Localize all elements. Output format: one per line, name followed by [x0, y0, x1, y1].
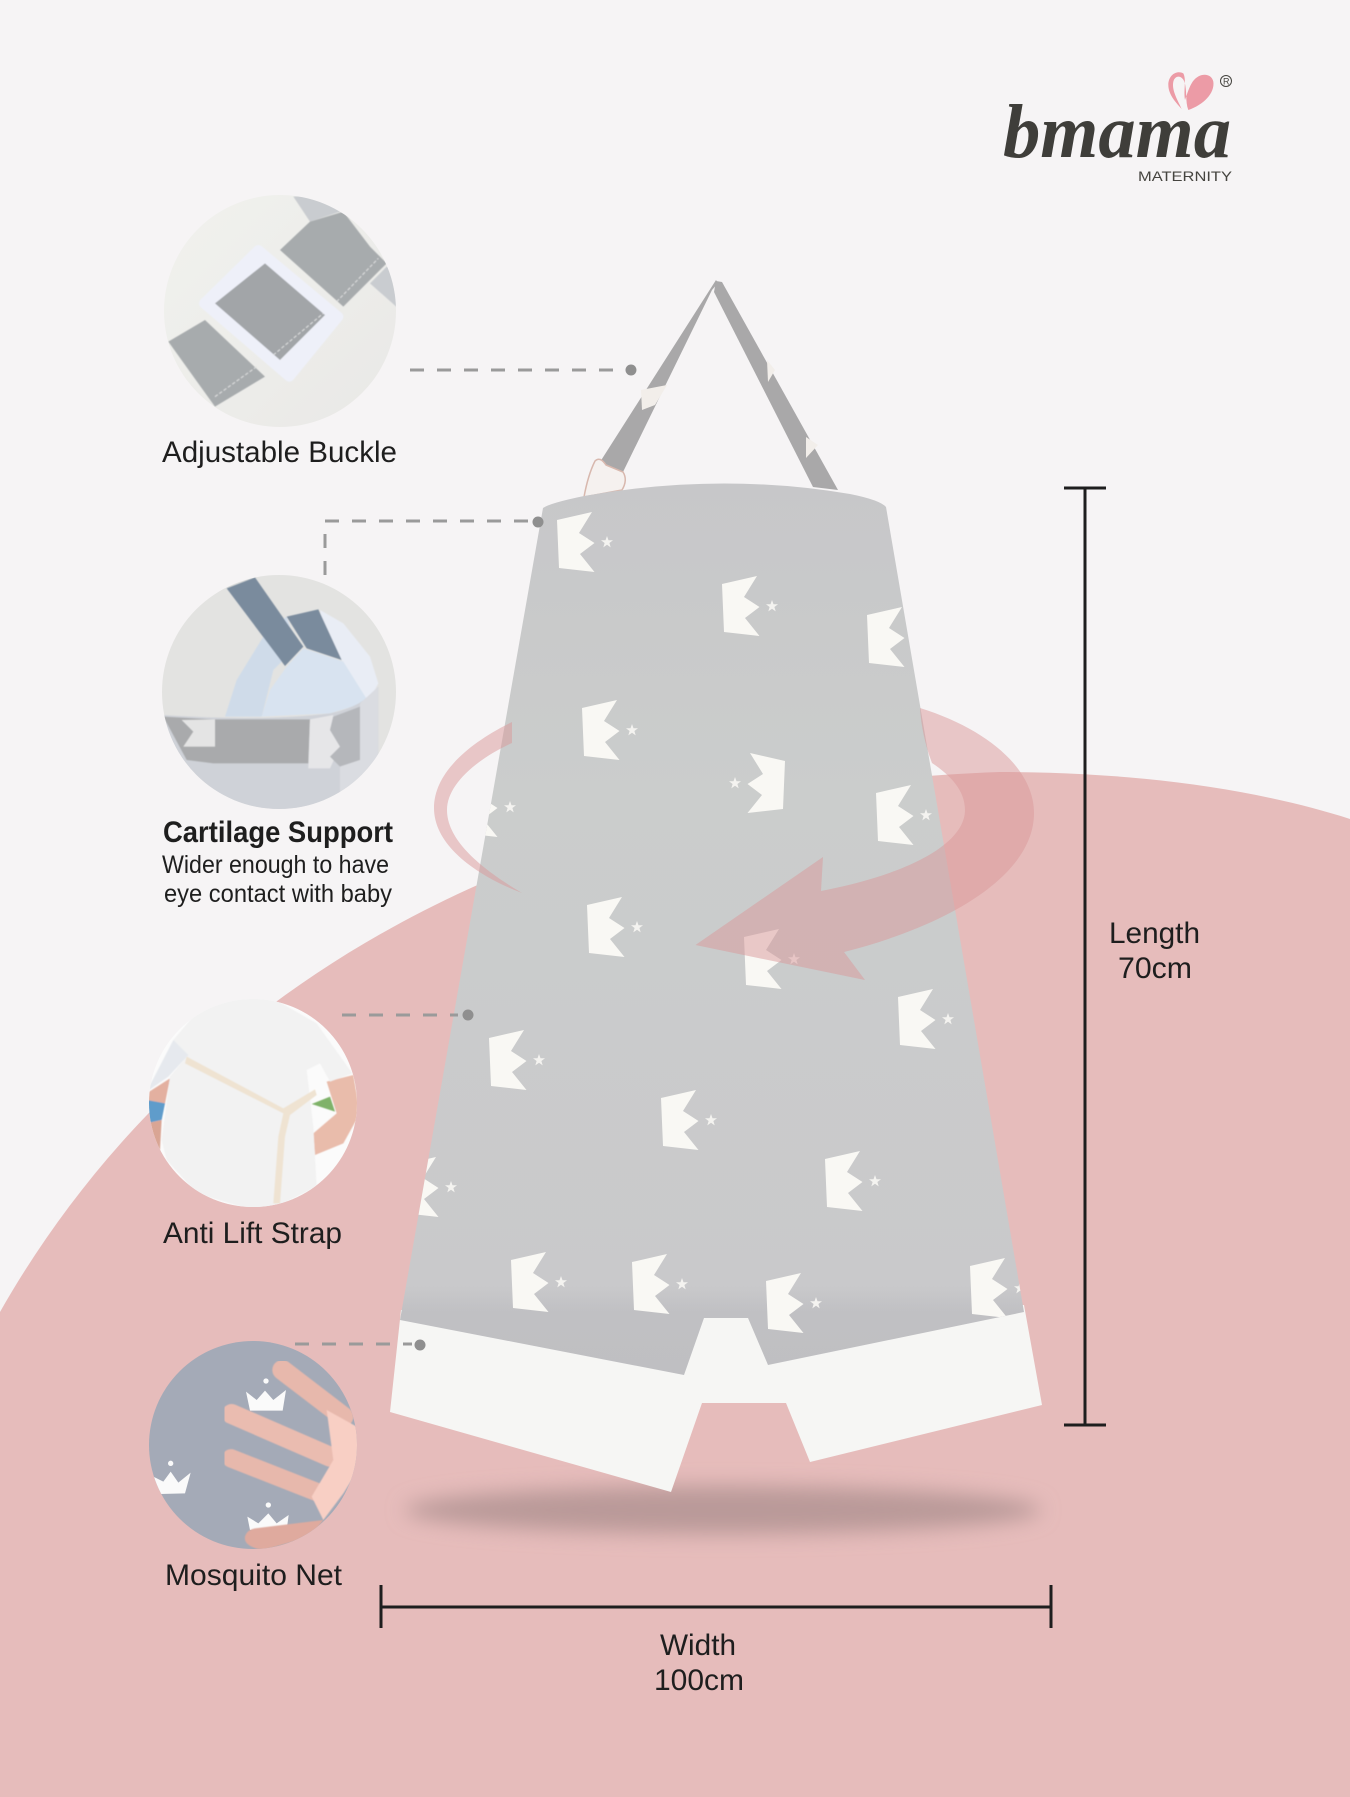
- logo heart: [1168, 72, 1213, 110]
- label: cartilage support heading: Cartilage Support: [163, 816, 393, 849]
- length bracket: [1064, 488, 1106, 1425]
- registered mark: [1220, 76, 1232, 86]
- logo tagline: MATERNITY: [1138, 168, 1233, 184]
- label: cartilage support description: Wider enough to have: [162, 851, 389, 879]
- label: cartilage support description: eye contact with baby: [164, 880, 392, 908]
- width bracket: [381, 1585, 1051, 1628]
- pink curved background: [0, 772, 1350, 1797]
- left swoosh: [434, 722, 522, 893]
- label: anti lift strap: Anti Lift Strap: [163, 1217, 342, 1250]
- length value: 70cm: [1118, 952, 1192, 985]
- white net panel: [390, 1305, 1042, 1492]
- label: mosquito net: Mosquito Net: [165, 1559, 343, 1592]
- width label: Width: [660, 1629, 736, 1662]
- dimension: length: [1064, 488, 1200, 1425]
- cover fabric: [400, 483, 1024, 1375]
- registered mark: R: [1223, 76, 1230, 86]
- detail photo: mosquito net: [147, 1337, 360, 1553]
- length label: Length: [1109, 917, 1200, 950]
- callout line: adjustable buckle: [410, 364, 636, 376]
- floor shadow: [405, 1486, 1041, 1534]
- crown pattern: [401, 512, 1026, 1333]
- main curved arrow: [696, 708, 1034, 980]
- callout line: anti lift strap: [342, 1010, 474, 1020]
- label: cartilage support description: [162, 851, 392, 908]
- callout line: cartilage support: [325, 516, 544, 575]
- label: adjustable buckle: Adjustable Buckle: [162, 436, 397, 469]
- rotation arrow: [434, 708, 1034, 980]
- nursing cover product: [390, 280, 1042, 1492]
- logo: bmama maternity: [1003, 72, 1233, 184]
- callout line: mosquito net: [295, 1340, 426, 1350]
- strap crown mark right: [767, 360, 775, 382]
- detail photo: anti lift strap: [147, 997, 360, 1213]
- dimension: width: [381, 1585, 1051, 1697]
- strap crown mark lower: [806, 437, 818, 458]
- width value: 100cm: [654, 1664, 744, 1697]
- strap buckle: [584, 459, 625, 497]
- detail photo: cartilage support: [160, 573, 400, 827]
- right strap: [714, 281, 838, 490]
- logo wordmark: bmama: [1003, 90, 1231, 174]
- strap crown marks: [641, 385, 667, 410]
- left strap: [600, 280, 718, 472]
- detail photo: buckle: [160, 190, 400, 430]
